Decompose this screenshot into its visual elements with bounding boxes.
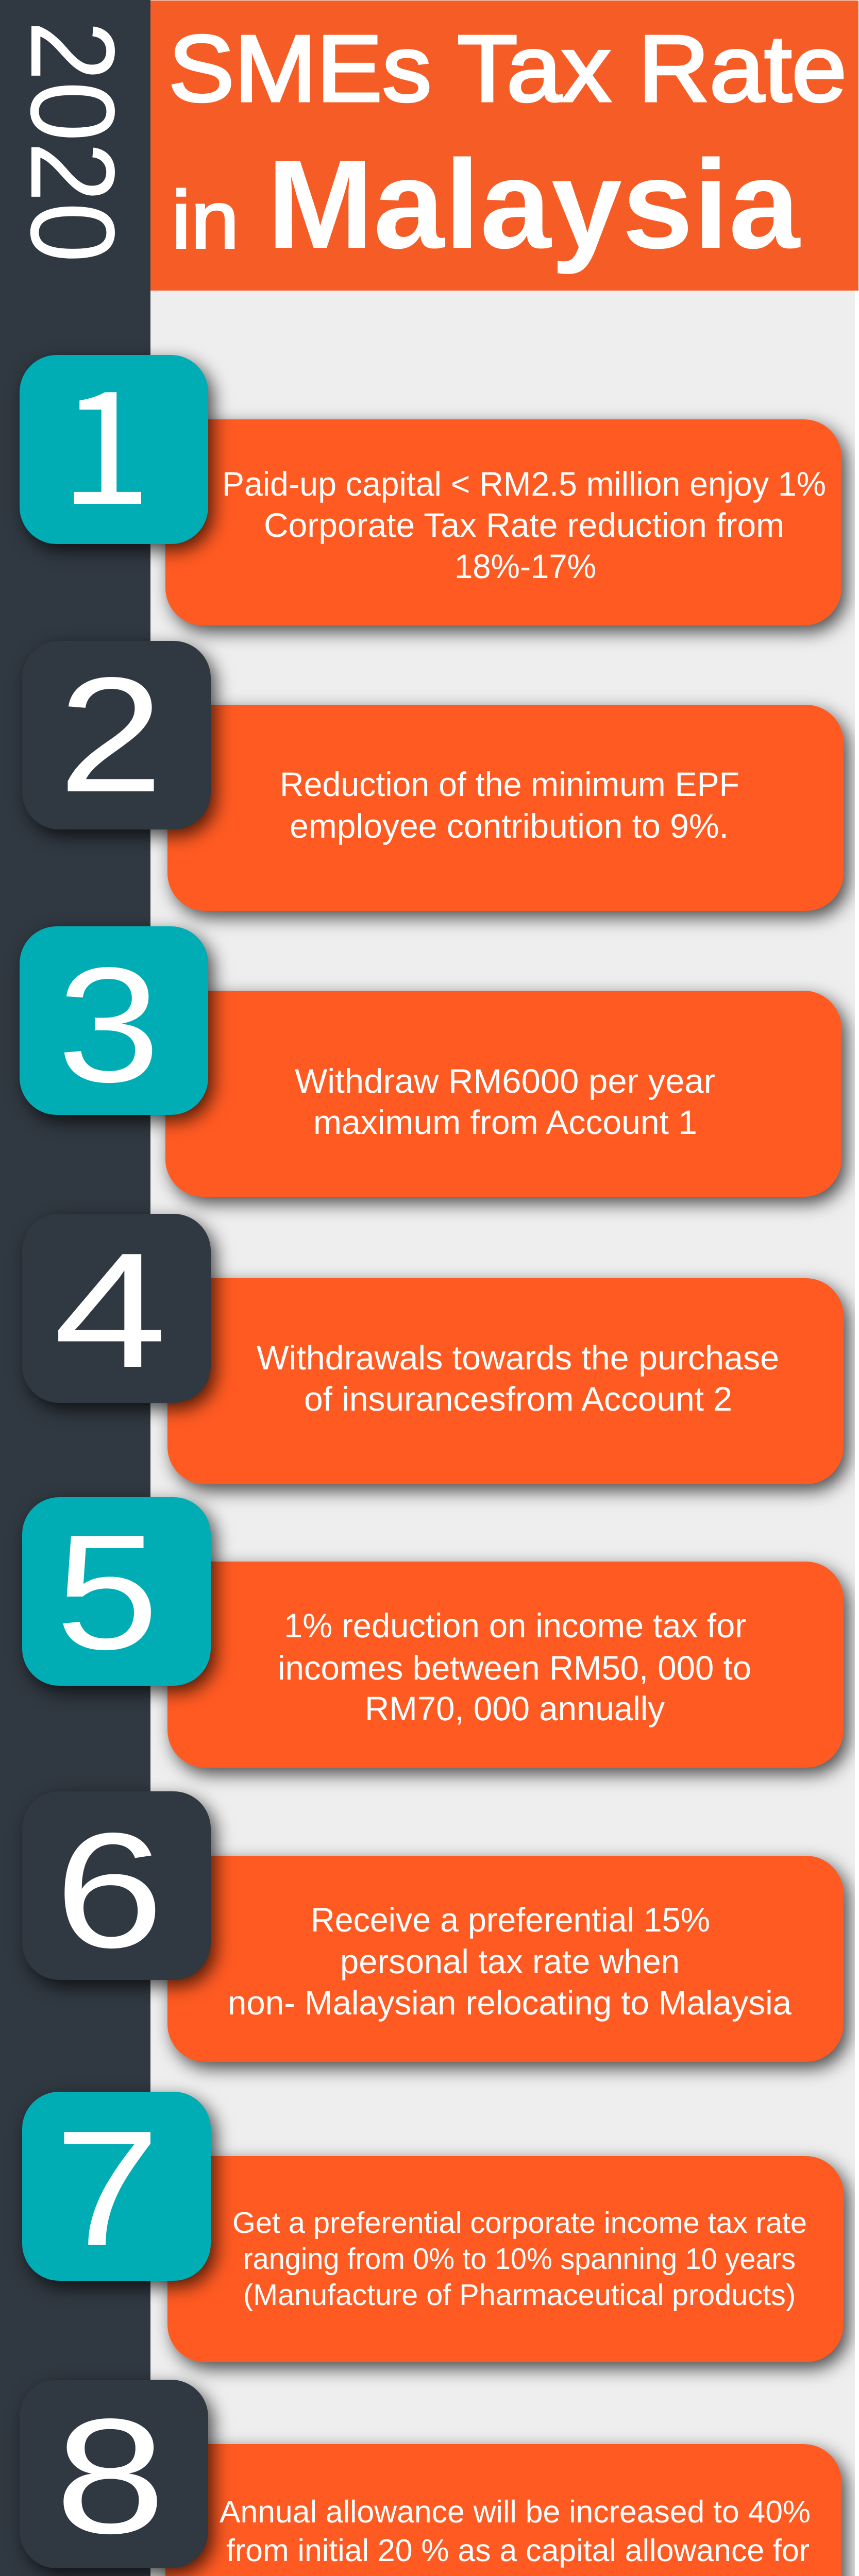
text 8: Annual allowance will be increased to 40% [220,2494,811,2529]
year label rotated: 2020 [6,21,139,263]
badge 8 [20,2380,208,2568]
card 1 [165,419,841,625]
item 7 [22,2092,844,2362]
text 3 [295,1062,715,1141]
text 7 [232,2206,807,2312]
badge 4 [22,1214,211,1403]
badge 5 [22,1497,211,1686]
text 2: employee contribution to 9%. [290,807,729,845]
item 1 [20,322,841,625]
text 6: non- Malaysian relocating to Malaysia [228,1984,791,2022]
badge 6 [22,1791,211,1982]
text 8 [220,2494,811,2576]
text 2 [280,765,739,845]
item 4 [22,1214,844,1484]
item 5 [22,1497,844,1768]
badge 8: 8 [55,2385,166,2568]
card 3 [165,991,841,1197]
header panel [150,1,858,291]
text 4: of insurancesfrom Account 2 [304,1380,732,1418]
text 5: 1% reduction on income tax for [284,1606,746,1645]
text 5: RM70, 000 annually [365,1689,665,1727]
badge 6: 6 [55,1799,164,1982]
card 4 [167,1278,844,1484]
text 7: (Manufacture of Pharmaceutical products) [243,2278,796,2312]
title line 2: in [172,175,239,265]
text 7: ranging from 0% to 10% spanning 10 years [243,2242,796,2276]
text 1: Corporate Tax Rate reduction from [264,506,784,544]
item 2 [22,641,844,911]
badge 2 [22,641,211,829]
text 4: Withdrawals towards the purchase [257,1338,779,1377]
card 5 [167,1562,844,1768]
text 2: Reduction of the minimum EPF [280,765,739,803]
item 3 [20,926,841,1197]
text 1 [222,465,826,585]
badge 3 [20,926,208,1116]
card 7 [167,2156,844,2362]
text 1: Paid-up capital < RM2.5 million enjoy 1% [222,465,826,503]
badge 4: 4 [54,1219,167,1402]
sidebar [0,0,150,2576]
title line 2: Malaysia [267,133,801,275]
item 8 [20,2380,841,2576]
badge 5: 5 [56,1501,159,1684]
badge 7: 7 [55,2097,160,2280]
text 5 [278,1606,751,1727]
card 8 [165,2444,841,2576]
title line 1: SMEs Tax Rate [169,15,847,121]
text 6 [228,1901,791,2022]
text 7: Get a preferential corporate income tax rate [232,2206,807,2240]
badge 7 [22,2092,211,2281]
text 3: Withdraw RM6000 per year [295,1062,715,1100]
badge 2: 2 [58,643,163,826]
card 6 [167,1856,844,2062]
item 6 [22,1791,844,2062]
badge 3: 3 [57,934,160,1116]
text 3: maximum from Account 1 [313,1103,697,1141]
text 6: personal tax rate when [340,1942,680,1980]
card 2 [167,705,844,911]
text 5: incomes between RM50, 000 to [278,1649,751,1687]
text 6: Receive a preferential 15% [311,1901,710,1939]
badge 1 [20,322,208,549]
text 4 [257,1338,779,1418]
badge 1: 1 [59,322,152,549]
text 1: 18%-17% [454,547,596,585]
text 8: from initial 20 % as a capital allowance for [226,2533,810,2568]
